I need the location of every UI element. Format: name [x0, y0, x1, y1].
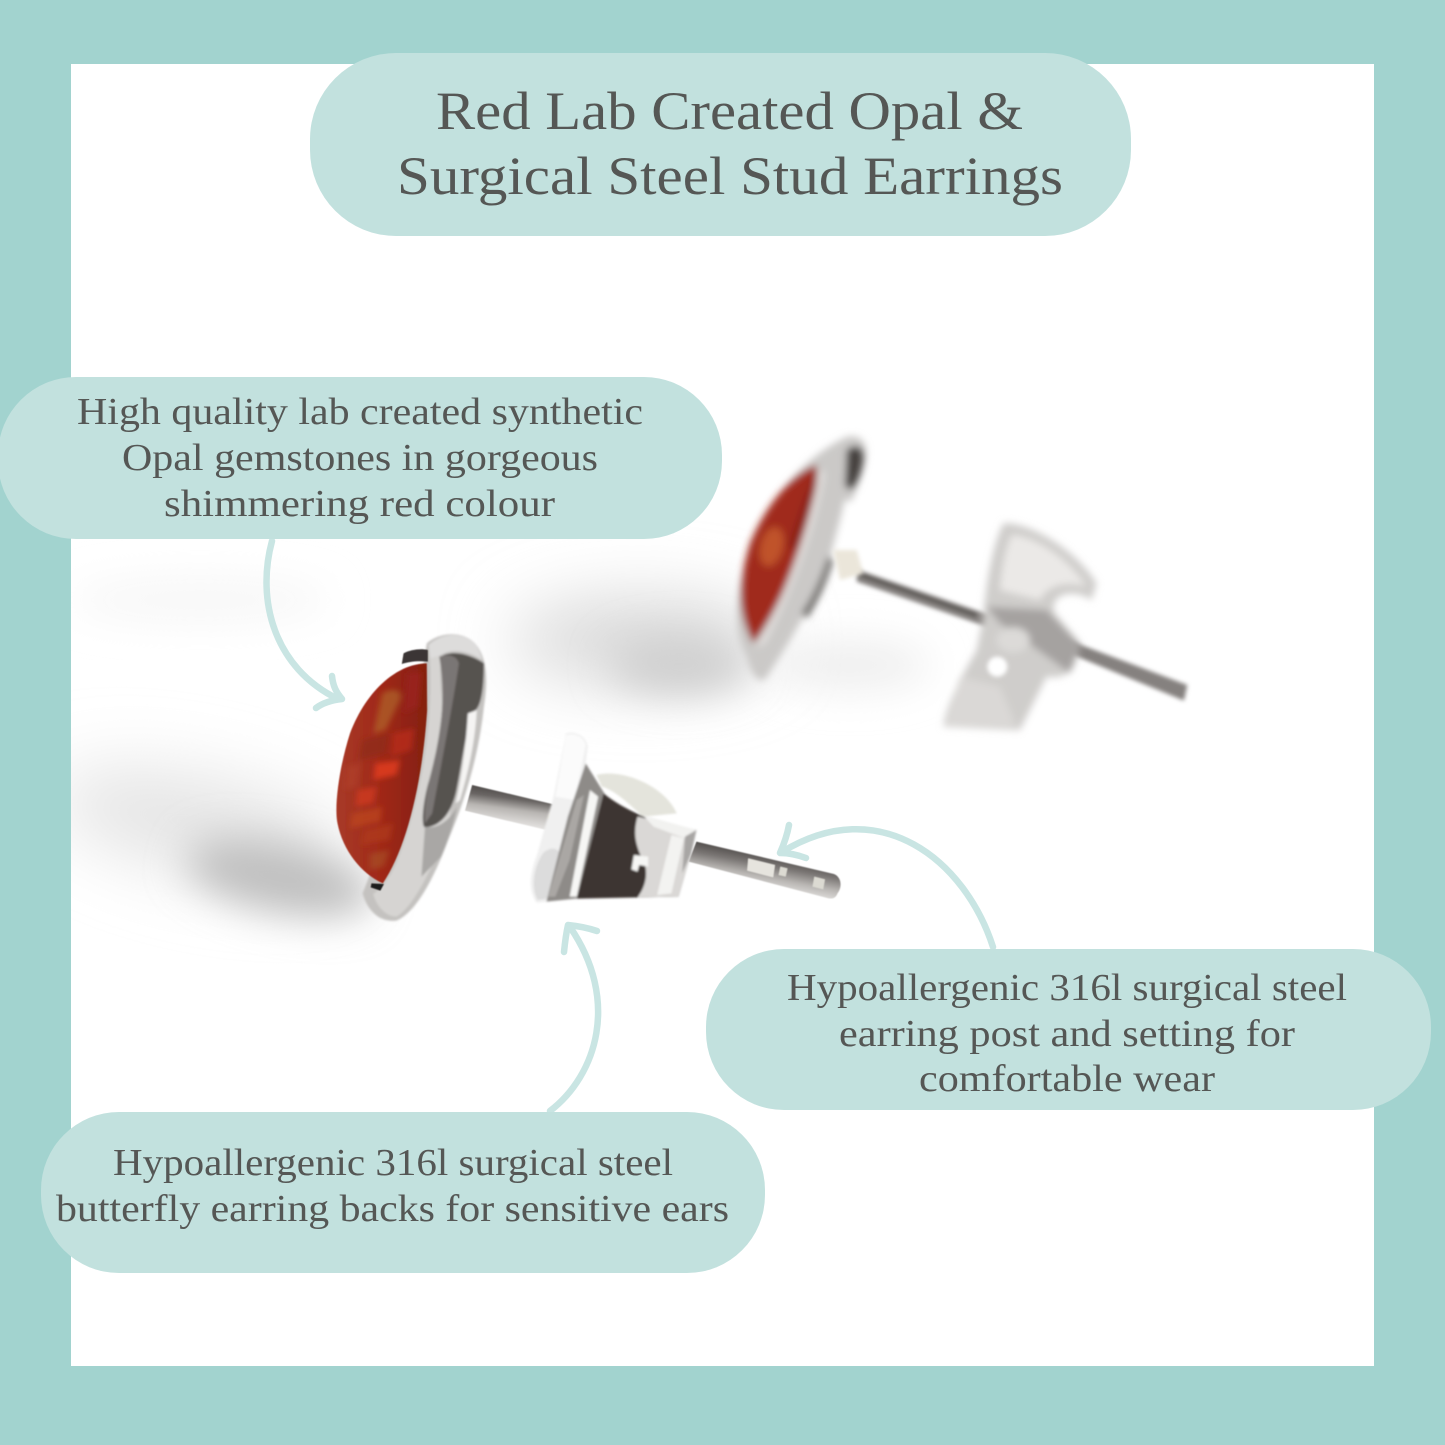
back earring post — [857, 569, 1187, 701]
callout text: surgical steel post: earring post and setting for — [839, 1013, 1295, 1055]
callout text: surgical steel post — [787, 967, 1347, 1100]
callout: surgical steel post — [706, 949, 1431, 1110]
front earring bezel — [362, 634, 486, 921]
arrow: to earring post — [780, 825, 993, 947]
callout text: butterfly backs — [56, 1142, 729, 1230]
opal shimmer streaks — [345, 672, 421, 870]
front earring (in focus) — [336, 634, 841, 921]
front earring opal stone — [336, 649, 428, 891]
callout text: butterfly backs: butterfly earring backs for sensitive ears — [56, 1188, 729, 1230]
callout text: opal gemstones — [77, 391, 643, 525]
callout text: opal gemstones: shimmering red colour — [164, 483, 555, 525]
title pill — [310, 53, 1131, 236]
callout text: opal gemstones: Opal gemstones in gorgeous — [122, 437, 598, 479]
title text — [397, 81, 1063, 206]
callout text: butterfly backs: Hypoallergenic 316l surgical steel — [113, 1142, 673, 1184]
front earring post — [465, 785, 841, 899]
callout text: opal gemstones: High quality lab created synthetic — [77, 391, 643, 433]
title text: Red Lab Created Opal & — [436, 81, 1023, 141]
back earring setting — [737, 436, 866, 680]
callout: butterfly backs — [41, 1112, 765, 1273]
arrow: to butterfly back — [550, 925, 598, 1111]
product photo: earrings — [43, 436, 1187, 931]
soft shadows on the surface — [43, 580, 930, 931]
back earring butterfly — [943, 523, 1097, 730]
back earring (out of focus) — [737, 436, 1187, 730]
front earring butterfly back — [531, 733, 696, 903]
back earring collar — [833, 550, 863, 580]
arrow: to opal gemstone — [267, 541, 342, 708]
callout: opal gemstones — [0, 377, 722, 539]
title text: Surgical Steel Stud Earrings — [397, 146, 1063, 206]
callout text: surgical steel post: comfortable wear — [919, 1058, 1215, 1100]
callout text: surgical steel post: Hypoallergenic 316l surgical steel — [787, 967, 1347, 1009]
